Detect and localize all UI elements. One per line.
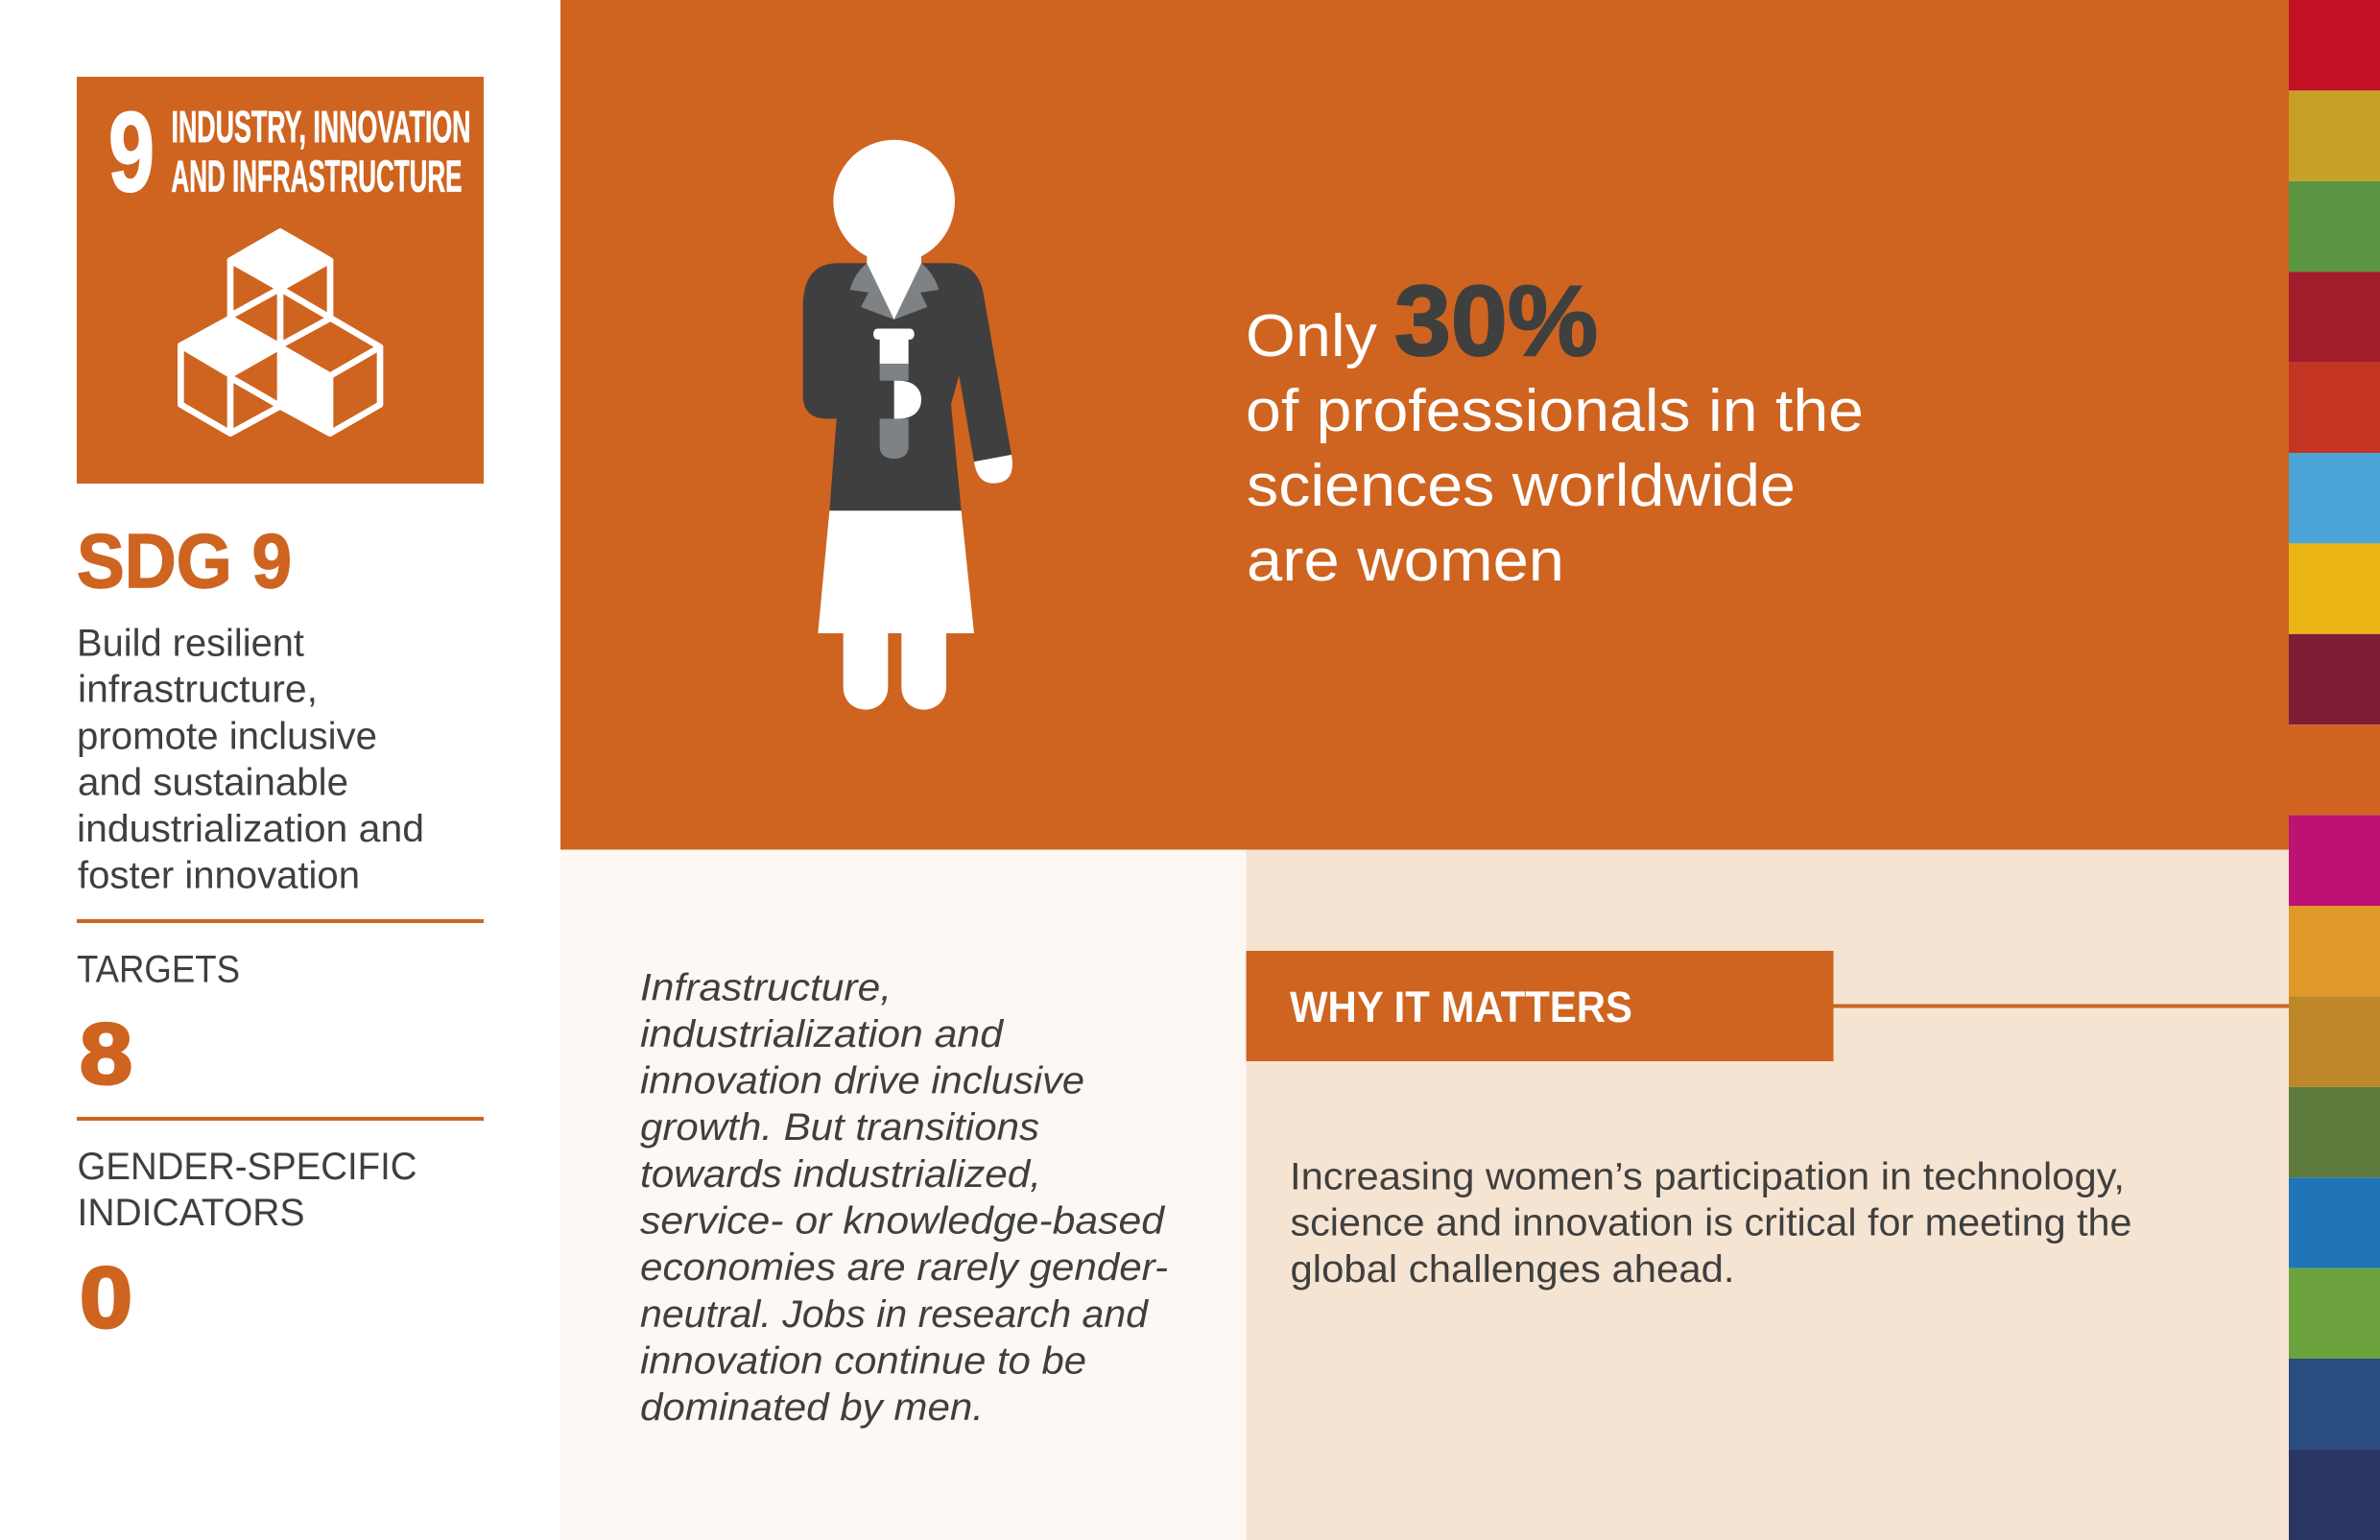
label: gender-specific indicators: GENDER-SPECIFIC (77, 1146, 416, 1188)
number: targets count: 8 (80, 1007, 132, 1102)
callout: 30% of professionals statistic: of professionals in the (1246, 378, 1864, 444)
figure right hand (974, 455, 1012, 484)
text block: intro paragraph (640, 967, 1168, 1429)
panel: hero banner background (560, 0, 2289, 850)
panel: SDG 9 logo tile (77, 77, 484, 484)
text block: intro paragraph: towards industrialized, (640, 1153, 1041, 1196)
text block: SDG 9 goal: foster innovation (78, 855, 360, 897)
figure skirt (818, 510, 974, 633)
label: gender-specific indicators (77, 1146, 416, 1234)
text block: SDG 9 goal: and sustainable (78, 761, 348, 803)
callout: 30% of professionals statistic: 30% (1394, 266, 1598, 377)
text block: intro paragraph: service- or knowledge-based (640, 1199, 1166, 1242)
callout: 30% of professionals statistic (1246, 266, 1864, 594)
logo title (171, 102, 470, 201)
icon: woman scientist holding test tube (803, 140, 1012, 710)
text block: intro paragraph: economies are rarely gender- (640, 1246, 1168, 1289)
text block: SDG 9 goal: infrastructure, (78, 669, 318, 711)
text block: SDG 9 goal: Build resilient (77, 623, 304, 665)
callout: 30% of professionals statistic: are women (1247, 528, 1564, 594)
panel: why it matters background (1246, 850, 2289, 1540)
panel: SDG colour stripe (2289, 0, 2380, 1540)
panel: intro text background (560, 850, 1246, 1540)
text block: why it matters body: global challenges ahead. (1290, 1248, 1735, 1291)
callout: 30% of professionals statistic: Only (1246, 303, 1377, 369)
text block: SDG 9 goal: industrialization and (77, 808, 424, 850)
figure lapels (850, 263, 939, 320)
test tube (873, 328, 915, 459)
icon: stacked cubes (180, 231, 380, 434)
heading: why it matters: WHY IT MATTERS (1290, 983, 1632, 1031)
text block: SDG 9 goal (77, 623, 424, 897)
figure left hand (894, 381, 921, 418)
logo title: INDUSTRY, INNOVATION (171, 102, 470, 152)
text block: why it matters body: science and innovation is critical for meeting the (1290, 1202, 2132, 1244)
figure legs (844, 632, 946, 710)
number: indicators count: 0 (80, 1250, 132, 1346)
logo number: 9 (108, 89, 155, 216)
heading: why it matters (1246, 951, 1833, 1061)
text block: intro paragraph: neutral. Jobs in research and (640, 1293, 1150, 1336)
label: gender-specific indicators: INDICATORS (77, 1192, 305, 1234)
text block: intro paragraph: growth. But transitions (640, 1106, 1039, 1149)
text block: SDG 9 goal: promote inclusive (77, 715, 377, 757)
text block: intro paragraph: innovation drive inclusive (640, 1059, 1084, 1102)
label: targets: TARGETS (77, 948, 240, 990)
text block: why it matters body (1290, 1155, 2132, 1291)
text block: intro paragraph: dominated by men. (640, 1386, 984, 1429)
text block: intro paragraph: innovation continue to be (640, 1339, 1086, 1382)
figure head (833, 140, 955, 263)
figure neck (867, 252, 921, 320)
logo title: AND INFRASTRUCTURE (171, 152, 463, 201)
text block: intro paragraph: industrialization and (640, 1013, 1005, 1055)
heading: SDG 9: SDG 9 (77, 518, 292, 604)
text block: intro paragraph: Infrastructure, (640, 967, 892, 1009)
callout: 30% of professionals statistic: sciences worldwide (1247, 453, 1796, 519)
figure jacket (803, 263, 1012, 510)
text block: why it matters body: Increasing women’s participation in technology, (1290, 1155, 2125, 1197)
